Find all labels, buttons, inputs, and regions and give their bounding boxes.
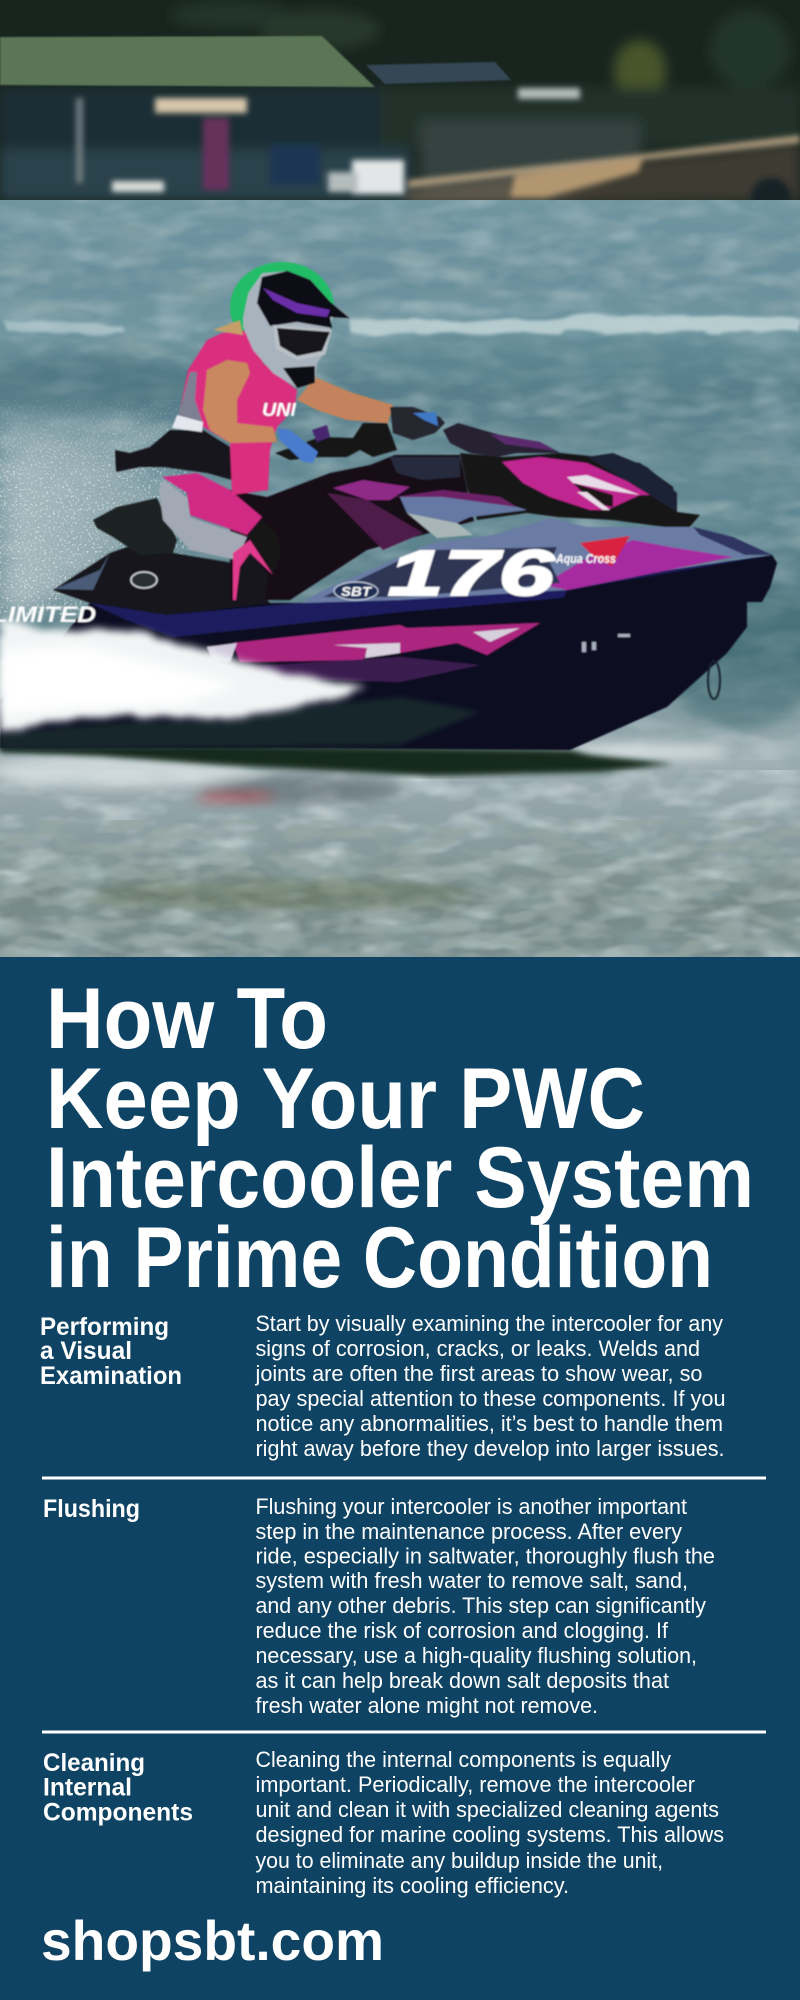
console — [230, 455, 474, 600]
blue grey panel — [400, 495, 527, 523]
section 3: cleaning internal components — [43, 1747, 724, 1898]
title — [46, 971, 754, 1306]
section 1 heading: a Visual — [40, 1337, 132, 1365]
section 1 body text: right away before they develop into larger issues. — [256, 1436, 724, 1461]
seat — [93, 498, 177, 555]
green roof — [0, 36, 375, 87]
section 1 heading: Performing — [40, 1313, 169, 1341]
sponsor logo — [555, 536, 630, 566]
section 1 body text: signs of corrosion, cracks, or leaks. Welds and — [256, 1336, 700, 1361]
number plate — [323, 547, 560, 597]
vest lettering: UNI — [262, 400, 297, 420]
race number: 176 — [388, 537, 555, 609]
section 1 body text: pay special attention to these components. If you — [256, 1386, 726, 1411]
section 1 body text — [255, 1311, 726, 1461]
section 2 body text: ride, especially in saltwater, thoroughly flush the — [256, 1544, 715, 1568]
section 2 body text: fresh water alone might not remove. — [256, 1693, 598, 1718]
section 1 body text: joints are often the first areas to show wear, so — [255, 1361, 702, 1386]
seat logo — [131, 572, 157, 588]
navy rub rail — [90, 555, 776, 637]
section 3 body text: Cleaning the internal components is equally — [256, 1747, 671, 1772]
front housing — [460, 453, 700, 530]
section 3 body text: unit and clean it with specialized cleaning agents — [256, 1797, 719, 1822]
section 1 body text: notice any abnormalities, it’s best to handle them — [256, 1411, 723, 1436]
hull highlights — [582, 634, 630, 652]
title: in Prime Condition — [46, 1210, 713, 1306]
handlebar hood — [443, 423, 560, 457]
section 3 body text: important. Periodically, remove the intercooler — [256, 1772, 695, 1797]
magenta front hood — [502, 457, 657, 510]
rider vest — [178, 330, 297, 495]
sponsor logo: Aqua Cross — [555, 551, 616, 566]
section 2 body text: as it can help break down salt deposits that — [256, 1668, 669, 1693]
helmet — [243, 271, 351, 388]
section 3 heading: Internal — [43, 1774, 132, 1802]
section 2 heading: Flushing — [43, 1495, 140, 1523]
wave crest — [5, 315, 800, 334]
section 1 body text: Start by visually examining the intercooler for any — [256, 1311, 723, 1336]
panel: dark blue content background — [0, 957, 800, 2000]
section 2 body text: Flushing your intercooler is another important — [256, 1494, 687, 1519]
website footer: shopsbt.com — [41, 1909, 384, 1972]
hull spray — [0, 618, 480, 750]
tow loop — [708, 661, 720, 699]
title: Intercooler System — [46, 1130, 754, 1226]
section 2 body text: system with fresh water to remove salt, sand, — [256, 1568, 688, 1593]
section 3 heading — [43, 1749, 193, 1826]
rider leg gray — [159, 480, 247, 560]
section 3 heading: Cleaning — [43, 1749, 145, 1777]
photo: rider on personal watercraft — [0, 0, 800, 957]
section 3 body text: you to eliminate any buildup inside the unit, — [256, 1848, 663, 1873]
section 2: flushing — [43, 1494, 715, 1718]
blue roof — [366, 62, 511, 84]
section 3 body text: maintaining its cooling efficiency. — [256, 1873, 569, 1898]
green helmet halo — [229, 261, 335, 332]
black strap and belt — [115, 430, 232, 480]
dash pod — [390, 457, 460, 480]
section 3 body text: designed for marine cooling systems. This allows — [256, 1822, 724, 1847]
hull — [0, 555, 777, 750]
title: How To — [46, 971, 328, 1067]
boathouse details — [76, 88, 800, 197]
section 2 body text: reduce the risk of corrosion and clogging. If — [256, 1618, 669, 1643]
background shoreline — [0, 0, 800, 218]
title: Keep Your PWC — [46, 1051, 645, 1147]
rider leg pink — [162, 473, 262, 535]
rider boot — [248, 520, 281, 575]
spray mist behind craft — [0, 400, 190, 625]
section 2 body text: step in the maintenance process. After every — [256, 1519, 682, 1544]
rear body — [53, 547, 270, 615]
gloves — [277, 407, 445, 463]
section 3 heading: Components — [43, 1798, 193, 1826]
watercraft — [0, 271, 777, 776]
hair — [213, 320, 243, 335]
magenta side panel — [333, 480, 410, 500]
section 3 body text — [256, 1747, 724, 1898]
rider arm left — [203, 360, 277, 443]
section 1 heading — [40, 1313, 182, 1390]
section 2 body text: necessary, use a high-quality flushing solution, — [256, 1643, 697, 1668]
deck — [302, 518, 772, 603]
rider arm right — [297, 377, 393, 423]
water — [0, 200, 800, 957]
hull stripe — [233, 623, 540, 662]
section 2 body text: and any other debris. This step can significantly — [256, 1593, 706, 1618]
water shadow — [0, 745, 673, 776]
distant watercraft — [748, 175, 794, 200]
sbt badge — [334, 582, 378, 600]
sbt badge: SBT — [341, 584, 372, 599]
magenta deck section — [543, 540, 733, 590]
handlebars — [275, 423, 397, 460]
section 1 heading: Examination — [40, 1362, 182, 1390]
section 1: performing a visual examination — [40, 1311, 726, 1461]
section 2 body text — [256, 1494, 715, 1718]
